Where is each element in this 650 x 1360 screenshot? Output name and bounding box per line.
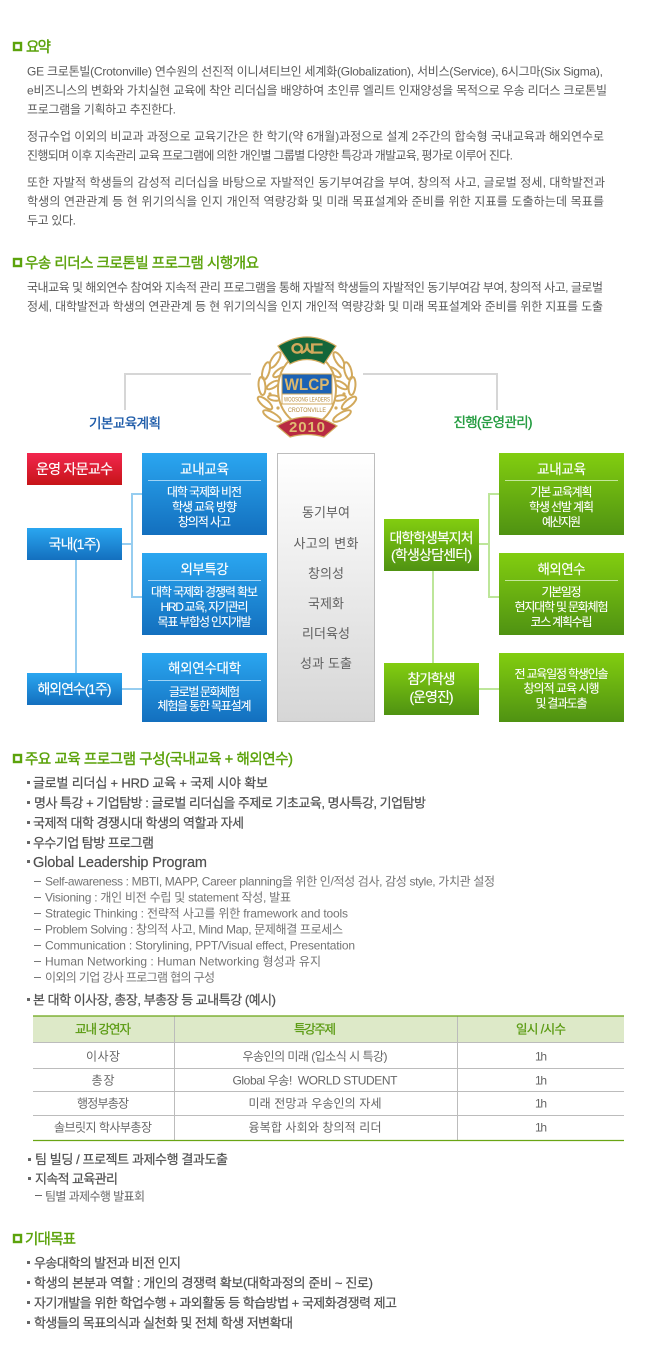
table: campus lectures: 1h — [535, 1120, 547, 1134]
text block: summary paragraph 3 — [27, 176, 605, 228]
panel: central goals — [278, 454, 374, 722]
list: global leadership sub-items: Visioning : 개인 비전 수립 및 statement 작성, 발표 — [45, 890, 291, 904]
icon: WLCP emblem: ㅇㅅㄷ — [288, 339, 326, 361]
box: on-campus education: 학생 교육 방향 — [172, 500, 237, 514]
table: campus lectures: Global 우송! WORLD STUDENT — [232, 1074, 398, 1088]
box: overseas university — [142, 653, 267, 722]
panel: central goals: 창의성 — [308, 566, 344, 581]
section: main education program — [14, 751, 624, 1204]
table: campus lectures: 융복합 사회와 창의적 리더 — [248, 1120, 382, 1134]
box: advisory professor — [27, 453, 122, 485]
list: expected goals: 학생의 본분과 역할 : 개인의 경쟁력 확보(대학과정의 준비 ~ 진로) — [34, 1276, 373, 1290]
list: program items — [27, 776, 426, 871]
box: on-campus education plan: 예산지원 — [542, 515, 581, 529]
list: global leadership sub-items — [34, 874, 495, 984]
box: participating students — [384, 663, 479, 715]
heading: summary: 요약 — [26, 39, 51, 56]
list: program items: 글로벌 리더십 + HRD 교육 + 국제 시야 확보 — [33, 776, 268, 790]
box: external lectures: 외부특강 — [180, 562, 228, 577]
panel: central goals: 국제화 — [308, 596, 344, 611]
box: overseas 1 week: 해외연수(1주) — [38, 681, 112, 697]
box: domestic 1 week: 국내(1주) — [48, 536, 100, 552]
text block: program overview: 정세, 대학발전과 학생의 연관관계 등 현 위기의식을 인지 개인적 역량강화 및 미래 목표설계와 준비를 위한 지표를 도출 — [27, 300, 603, 314]
box: overseas training plan: 기본일정 — [542, 585, 582, 599]
icon: WLCP emblem: CROTONVILLE — [288, 407, 327, 414]
heading: main education program: 주요 교육 프로그램 구성(국내교육 + 해외연수) — [25, 751, 293, 768]
table: campus lectures: 1h — [535, 1074, 547, 1088]
list: expected goals: 학생들의 목표의식과 실천화 및 전체 학생 저변확대 — [34, 1316, 293, 1330]
list: expected goals: 자기개발을 위한 학업수행 + 과외활동 등 학습방법 + 국제화경쟁력 제고 — [34, 1296, 397, 1310]
box: student leading — [499, 653, 624, 722]
box: overseas training plan: 현지대학 및 문화체험 — [514, 600, 608, 614]
box: participating students: 참가학생 — [408, 671, 456, 687]
label: operation management: 진행(운영관리) — [454, 415, 532, 430]
box: domestic 1 week — [27, 528, 122, 560]
box: on-campus education plan: 기본 교육계획 — [530, 485, 592, 499]
section: expected goals — [14, 1231, 397, 1330]
list: global leadership sub-items: Communication : Storylining, PPT/Visual effect, Presentation — [45, 938, 355, 952]
box: overseas university: 글로벌 문화체험 — [169, 685, 240, 699]
connectors: left column — [76, 494, 142, 689]
text block: summary paragraph 2: 진행되며 이후 지속관리 교육 프로그램에 의한 개인별 그룹별 다양한 특강과 개발교육, 평가로 이루어 진다. — [27, 148, 513, 162]
icon: WLCP emblem: 2010 — [289, 419, 325, 436]
box: on-campus education plan: 교내교육 — [537, 462, 586, 477]
table: campus lectures — [33, 1016, 624, 1140]
box: student welfare office: (학생상담센터) — [391, 547, 472, 563]
box: external lectures — [142, 553, 267, 635]
diagram: program organization — [27, 337, 624, 722]
text block: summary paragraph 3: 학생의 연관관계 등 현 위기의식을 인지 개인적 역량강화 및 미래 목표설계와 준비를 위한 지표를 도출하는데 목표를 — [27, 194, 604, 208]
list: program items: 국제적 대학 경쟁시대 학생의 역할과 자세 — [33, 816, 244, 830]
list: team and follow-up items: 지속적 교육관리 — [35, 1172, 118, 1186]
table: campus lectures: 솔브릿지 학사부총장 — [54, 1120, 152, 1134]
box: student leading: 창의적 교육 시행 — [524, 680, 600, 696]
box: participating students: (운영진) — [410, 689, 454, 705]
table: campus lectures: 1h — [535, 1096, 547, 1110]
connector: logo to left column — [125, 374, 251, 410]
box: advisory professor: 운영 자문교수 — [36, 461, 113, 477]
box: on-campus education — [142, 453, 267, 535]
text block: summary paragraph 2 — [27, 128, 604, 162]
text block: summary paragraph 1: GE 크로톤빌(Crotonville) 연수원의 선진적 이니셔티브인 세계화(Globalization), 서비스(Service), 6시그마(Six Sigma), — [27, 64, 603, 78]
panel: central goals: 사고의 변화 — [294, 536, 359, 551]
box: overseas training plan: 코스 계획수립 — [530, 615, 592, 629]
text block: summary paragraph 1: 프로그램을 기획하고 추진한다. — [27, 102, 176, 116]
table: campus lectures: 행정부총장 — [77, 1096, 129, 1110]
box: on-campus education: 창의적 사고 — [178, 515, 231, 529]
box: on-campus education: 교내교육 — [180, 462, 229, 477]
box: overseas training plan — [499, 553, 624, 635]
icon: WLCP emblem: WOOSONG LEADERS — [284, 396, 330, 404]
text block: program overview — [27, 280, 603, 314]
list: expected goals — [27, 1256, 397, 1330]
label: basic education plan: 기본교육계획 — [89, 416, 161, 431]
list: program items: 명사 특강 + 기업탐방 : 글로벌 리더십을 주제로 기초교육, 명사특강, 기업탐방 — [34, 796, 426, 810]
text block: program overview: 국내교육 및 해외연수 참여와 지속적 관리 프로그램을 통해 자발적 학생들의 자발적인 동기부여감 부여, 창의적 사고, 글로벌 — [27, 280, 603, 294]
table: campus lectures: 1h — [535, 1050, 547, 1064]
table: campus lectures: 교내 강연자 — [75, 1022, 131, 1036]
panel: central goals: 리더육성 — [302, 626, 350, 641]
list: global leadership sub-items: 이외의 기업 강사 프로그램 협의 구성 — [45, 970, 215, 984]
list item: campus lectures: 본 대학 이사장, 총장, 부총장 등 교내특강 (예시) — [33, 992, 276, 1008]
box: overseas 1 week — [27, 673, 122, 705]
heading: summary — [14, 39, 51, 56]
connectors: right column — [433, 494, 499, 689]
section: program overview — [14, 255, 603, 314]
list: global leadership sub-items: Strategic Thinking : 전략적 사고를 위한 framework and tools — [45, 906, 348, 920]
list: team and follow-up items: 팀 빌딩 / 프로젝트 과제수행 결과도출 — [35, 1152, 228, 1167]
section: summary — [14, 39, 607, 228]
list: team and follow-up items — [28, 1152, 228, 1204]
box: on-campus education: 대학 국제화 비전 — [167, 485, 242, 499]
table: campus lectures: 일시 /시수 — [516, 1022, 566, 1036]
icon: WLCP emblem — [256, 337, 358, 437]
panel: central goals: 동기부여 — [302, 505, 350, 520]
list: global leadership sub-items: Human Networking : Human Networking 형성과 유지 — [45, 954, 321, 968]
list: expected goals: 우송대학의 발전과 비전 인지 — [34, 1256, 181, 1270]
box: on-campus education plan: 학생 선발 계획 — [529, 500, 594, 514]
box: student leading: 및 결과도출 — [536, 696, 588, 710]
box: student welfare office — [384, 519, 479, 571]
text block: summary paragraph 3: 두고 있다. — [27, 214, 76, 228]
text block: summary paragraph 1 — [27, 64, 607, 116]
table: campus lectures: 우송인의 미래 (입소식 시 특강) — [242, 1050, 388, 1064]
table: campus lectures: 총장 — [92, 1074, 114, 1088]
table: campus lectures: 이사장 — [86, 1050, 120, 1064]
connector: logo to right column — [363, 374, 497, 410]
box: on-campus education plan — [499, 453, 624, 535]
box: overseas university: 체험을 통한 목표설계 — [158, 699, 252, 713]
list: program items: 우수기업 탐방 프로그램 — [33, 836, 154, 850]
box: external lectures: 대학 국제화 경쟁력 확보 — [151, 585, 258, 599]
table: campus lectures: 미래 전망과 우송인의 자세 — [248, 1096, 382, 1110]
list: program items: Global Leadership Program — [33, 855, 207, 871]
text block: summary paragraph 3: 또한 자발적 학생들의 감성적 리더십을 바탕으로 자발적인 동기부여감을 부여, 창의적 사고, 글로벌 정세, 대학발전과 — [27, 176, 605, 190]
panel: central goals: 성과 도출 — [300, 656, 352, 671]
list: global leadership sub-items: Self-awareness : MBTI, MAPP, Career planning을 위한 인/적성 검사, 감성 style, 가치관 설정 — [45, 874, 495, 888]
text block: summary paragraph 2: 정규수업 이외의 비교과 과정으로 교육기간은 한 학기(약 6개월)과정으로 설계 2주간의 합숙형 국내교육과 해외연수로 — [27, 128, 604, 144]
icon: WLCP emblem: WLCP — [284, 375, 330, 394]
box: student leading: 전 교육일정 학생인솔 — [514, 667, 608, 681]
box: student welfare office: 대학학생복지처 — [390, 530, 474, 546]
box: external lectures: 목표 부합성 인지개발 — [158, 615, 252, 629]
heading: program overview: 우송 리더스 크로톤빌 프로그램 시행개요 — [25, 255, 259, 272]
list: global leadership sub-items: Problem Solving : 창의적 사고, Mind Map, 문제해결 프로세스 — [45, 922, 343, 936]
box: overseas training plan: 해외연수 — [538, 562, 586, 577]
box: external lectures: HRD 교육, 자기관리 — [160, 600, 248, 614]
heading: expected goals: 기대목표 — [25, 1231, 76, 1248]
text block: summary paragraph 1: e비즈니스의 변화와 가치실현 교육에 착안 리더십을 배양하여 초인류 엘리트 인재양성을 목적으로 우송 리더스 크로톤빌 — [27, 84, 607, 98]
table: campus lectures: 특강주제 — [294, 1022, 336, 1036]
box: overseas university: 해외연수대학 — [168, 661, 241, 676]
list: team and follow-up items: 팀별 과제수행 발표회 — [45, 1188, 145, 1204]
